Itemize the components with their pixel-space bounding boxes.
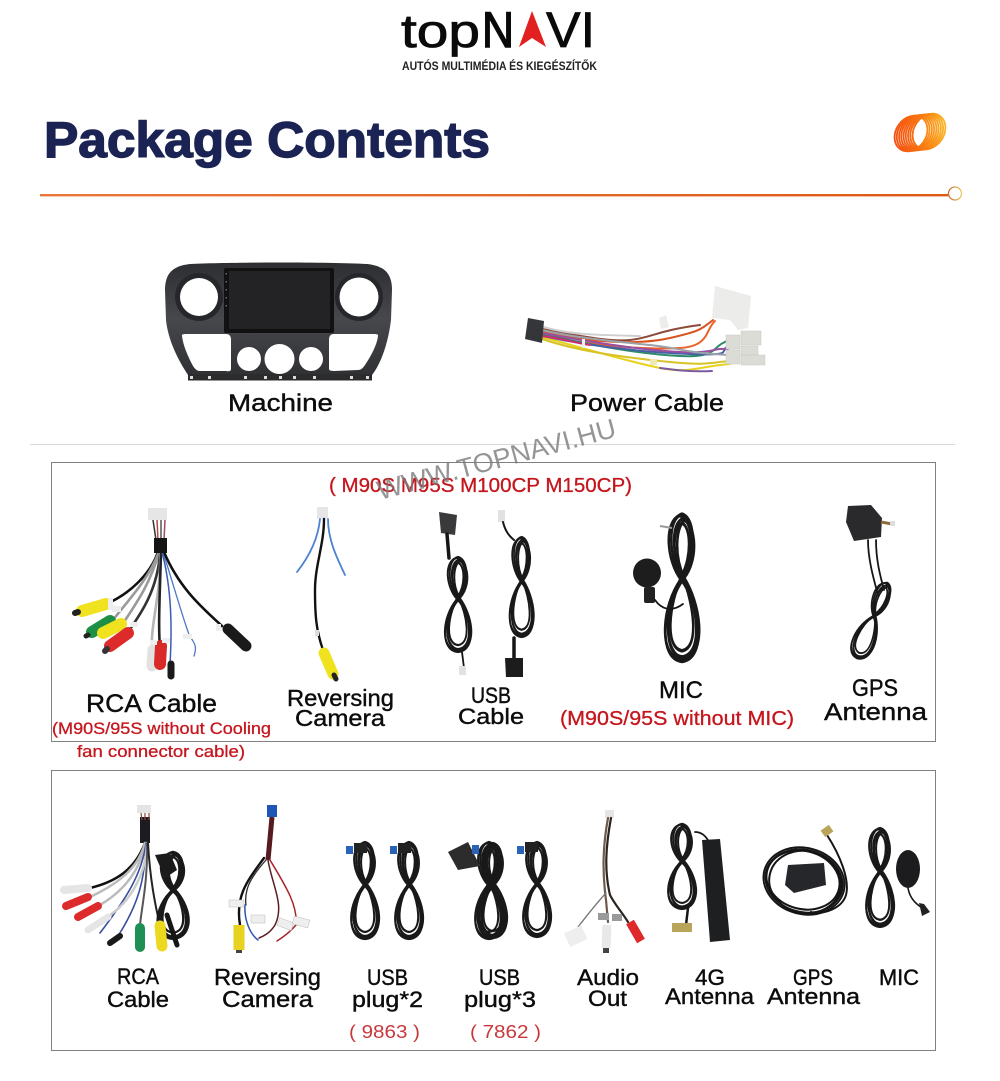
logo: topNAVI [401,2,598,73]
MIC note: (M90S/95S without MIC) [560,708,794,730]
RCA wires [106,552,222,664]
reversing camera label [287,685,394,731]
USB plug label: USB [479,965,520,990]
model note: ( M90S M95S M100CP M150CP) [329,475,632,497]
item: machine [165,262,392,417]
USB plug code: ( 7862 ) [470,1022,541,1042]
USB plug label [352,965,423,1012]
screen [224,268,334,333]
machine label: Machine [228,390,333,417]
RCA plugs [75,604,246,676]
RCA note: (M90S/95S without Cooling [52,719,271,738]
item: USB plug x2 [346,842,423,1042]
GPS label [767,965,861,1009]
item: audio out [564,810,641,1011]
audio out label [577,965,639,1011]
item: power cable [525,286,765,417]
logo: topNAVI: AUTÓS MULTIMÉDIA ÉS KIEGÉSZÍTŐK [402,60,598,73]
machine frame [165,262,392,375]
item: 4G antenna [665,824,755,1009]
RCA note: fan connector cable) [77,742,245,761]
item: GPS antenna, second group [756,825,861,1009]
reversing camera label: Reversing [287,685,394,711]
MIC label: MIC [879,965,919,990]
watermark: WWW.TOPNAVI.HU [374,413,619,506]
title: Package Contents [44,112,490,168]
4G label: Antenna [665,984,755,1009]
RCA note [52,719,271,761]
panel: first accessories group [52,462,936,742]
item: reversing camera cable, second group [214,805,321,1012]
USB plug label: plug*2 [352,987,423,1012]
item: MIC [560,514,794,730]
USB plug label [464,965,536,1012]
RCA label: RCA [117,964,159,989]
icon: orange spring [888,107,952,158]
power cable label: Power Cable [570,390,724,417]
RCA label: RCA Cable [86,690,217,718]
USB plug code: ( 9863 ) [349,1022,420,1042]
RCA label [107,964,169,1012]
reversing camera label: Camera [295,705,385,731]
lower windows [182,334,378,374]
GPS label: GPS [793,965,833,990]
item: MIC, second group [866,828,930,990]
GPS label [824,675,928,726]
GPS label: Antenna [824,699,928,726]
white label card [659,286,751,330]
connector [525,318,544,343]
item: RCA cable [52,508,271,761]
item: RCA cable, second group [64,805,189,1012]
USB plug label: USB [367,965,408,990]
logo: topNAVI: N [482,2,514,58]
panel: second accessories group [52,770,936,1050]
USB label [458,683,524,729]
audio out label: Audio [577,965,639,990]
item: USB plug x3 [448,842,551,1042]
RCA label: Cable [107,987,169,1012]
heading rule with end circle [40,187,962,200]
reversing camera label [214,964,321,1012]
GPS label: Antenna [767,984,861,1009]
reversing camera label: Camera [222,986,313,1012]
logo: topNAVI: VI [546,2,595,58]
logo: topNAVI: top [401,5,480,57]
USB label: Cable [458,704,524,729]
vent circles [175,273,383,321]
4G label: 4G [695,965,725,990]
USB plug label: plug*3 [464,987,536,1012]
item: USB cable [439,510,534,729]
MIC label: MIC [659,677,703,704]
4G label [665,965,755,1009]
reversing camera label: Reversing [214,964,321,990]
connector block [726,331,765,365]
divider [30,444,955,445]
item: reversing camera cable [287,507,394,731]
audio out label: Out [588,986,627,1011]
item: GPS antenna [824,505,928,726]
power wires [542,320,732,371]
GPS label: GPS [852,675,898,702]
USB label: USB [471,683,511,708]
